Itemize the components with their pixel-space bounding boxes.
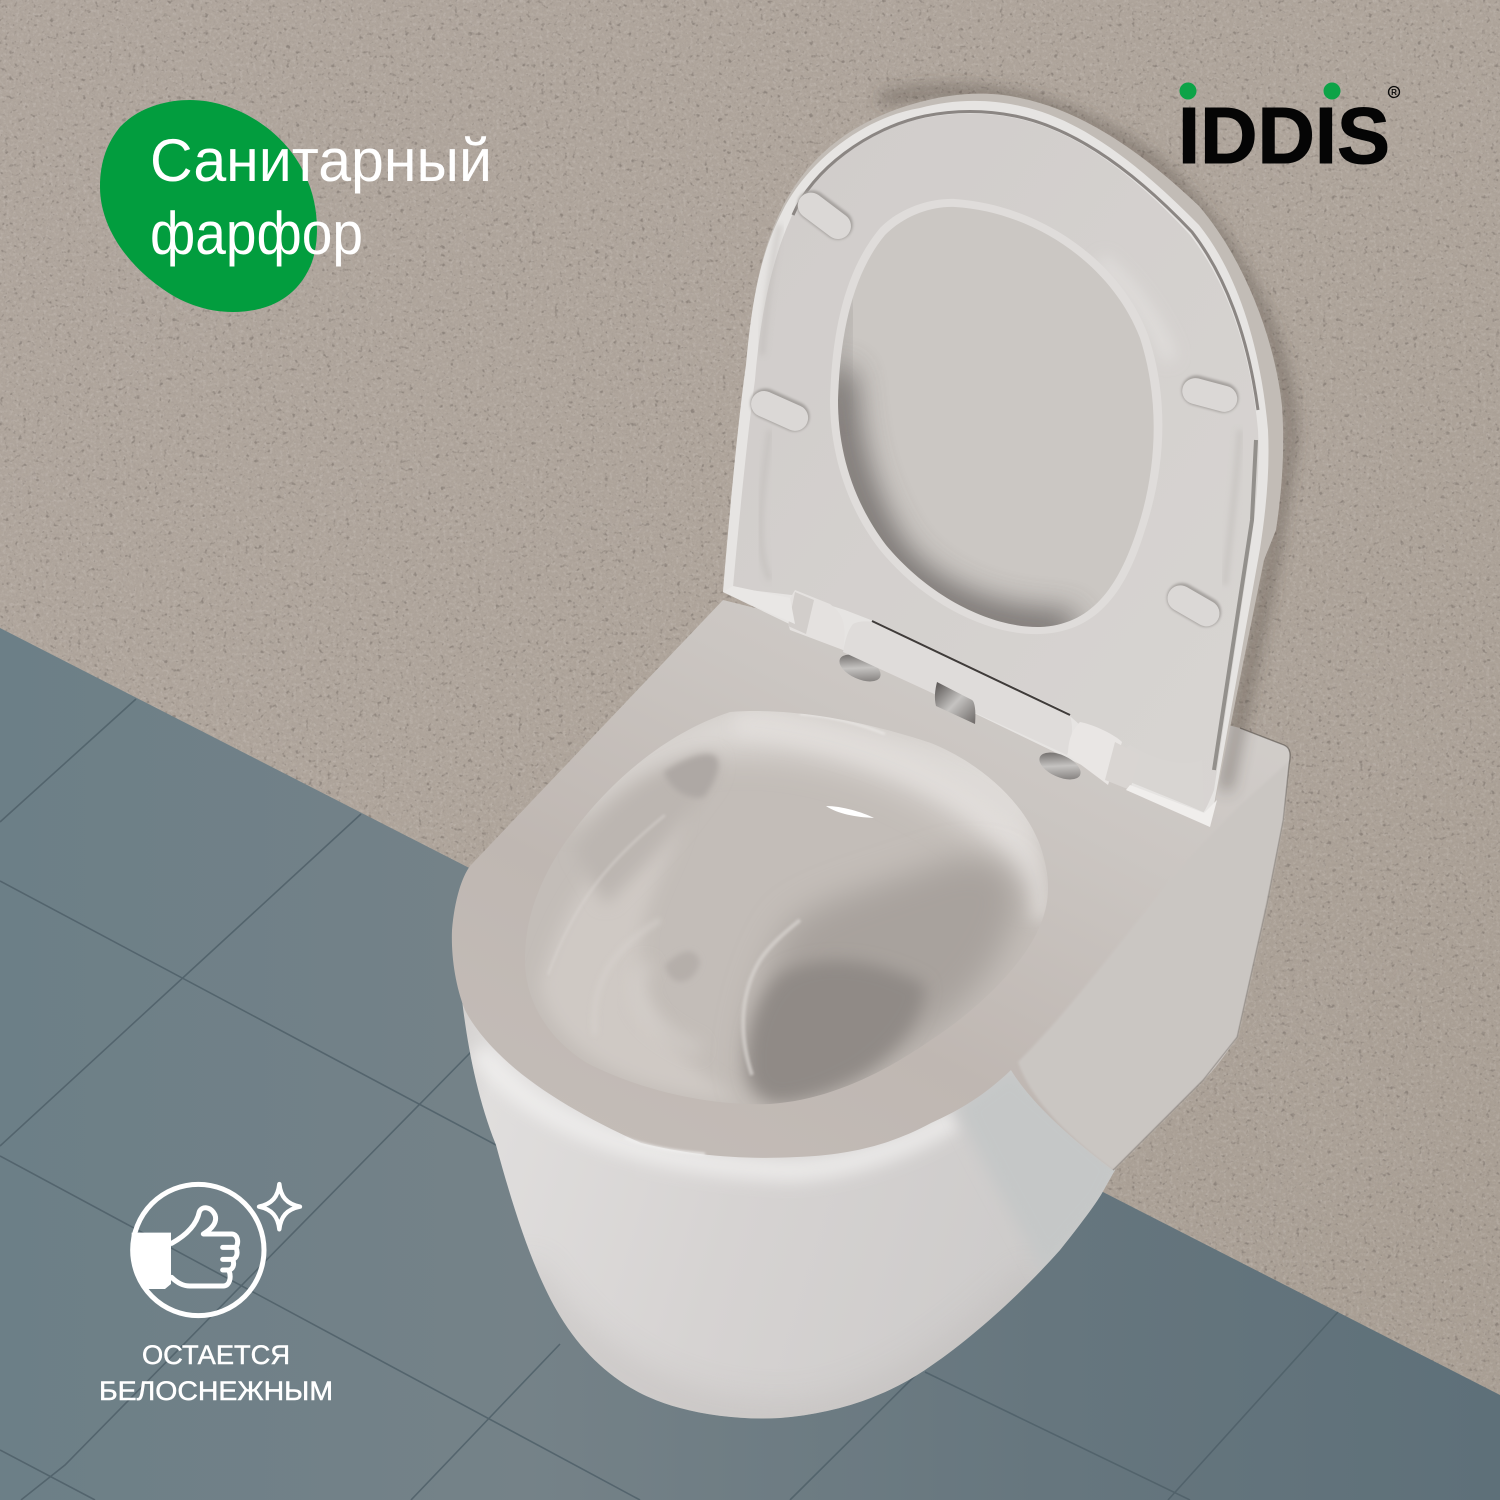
icon: thumbs up with sparkle bbox=[132, 1184, 300, 1316]
seat recess highlights bbox=[1100, 260, 1170, 360]
seat bumpers bbox=[746, 184, 1242, 632]
right hinge bracket bbox=[1068, 722, 1122, 785]
caption: БЕЛОСНЕЖНЫМ bbox=[99, 1376, 333, 1406]
seat inner face bbox=[733, 114, 1259, 812]
badge: green blob bbox=[100, 100, 317, 312]
rim water inlet bbox=[591, 772, 686, 899]
body side patch bbox=[960, 1075, 1112, 1263]
lid inside opening bbox=[838, 207, 1154, 627]
seat corner hollow bbox=[1122, 745, 1204, 812]
seat shadow on wall bbox=[880, 92, 1290, 790]
rim highlight bbox=[625, 1138, 705, 1154]
caption bbox=[99, 1340, 333, 1406]
hinge assembly bbox=[723, 586, 1217, 827]
seat opening ring bbox=[830, 199, 1162, 634]
toilet lower body bbox=[450, 990, 1130, 1430]
toilet seat: raised bbox=[723, 92, 1290, 827]
bowl upper bright zone bbox=[587, 711, 1044, 875]
heading bbox=[150, 127, 492, 267]
seat top shadow gap bbox=[793, 112, 1258, 410]
bowl left pale band bbox=[545, 858, 712, 1092]
logo: IDDIS: R bbox=[1391, 88, 1397, 97]
back plate outline bbox=[1113, 728, 1290, 1170]
seat lower lip bbox=[1126, 785, 1217, 827]
heading: Санитарный bbox=[150, 127, 492, 194]
seat side bbox=[723, 94, 1283, 827]
bowl highlight bbox=[826, 806, 874, 818]
caption: ОСТАЕТСЯ bbox=[142, 1340, 290, 1370]
floor: blue-grey tiles bbox=[0, 628, 1500, 1500]
seat right gap bbox=[1214, 440, 1256, 770]
bowl interior bbox=[538, 711, 1048, 1104]
back plate matte panel bbox=[1018, 762, 1288, 1170]
toilet top surface bbox=[452, 600, 1290, 1170]
hinge chrome slot bbox=[935, 682, 975, 724]
bowl streaks bbox=[593, 815, 664, 888]
hinge chrome posts bbox=[835, 649, 885, 687]
toilet: wall-hung bowl bbox=[450, 600, 1290, 1430]
seat white rim bbox=[723, 101, 1269, 827]
left hinge bracket bbox=[788, 590, 845, 650]
drain bbox=[748, 858, 1018, 1102]
hinge bar bbox=[843, 621, 1072, 755]
logo: IDDIS: IDDIS bbox=[1178, 91, 1390, 180]
heading: фарфор bbox=[150, 200, 363, 267]
